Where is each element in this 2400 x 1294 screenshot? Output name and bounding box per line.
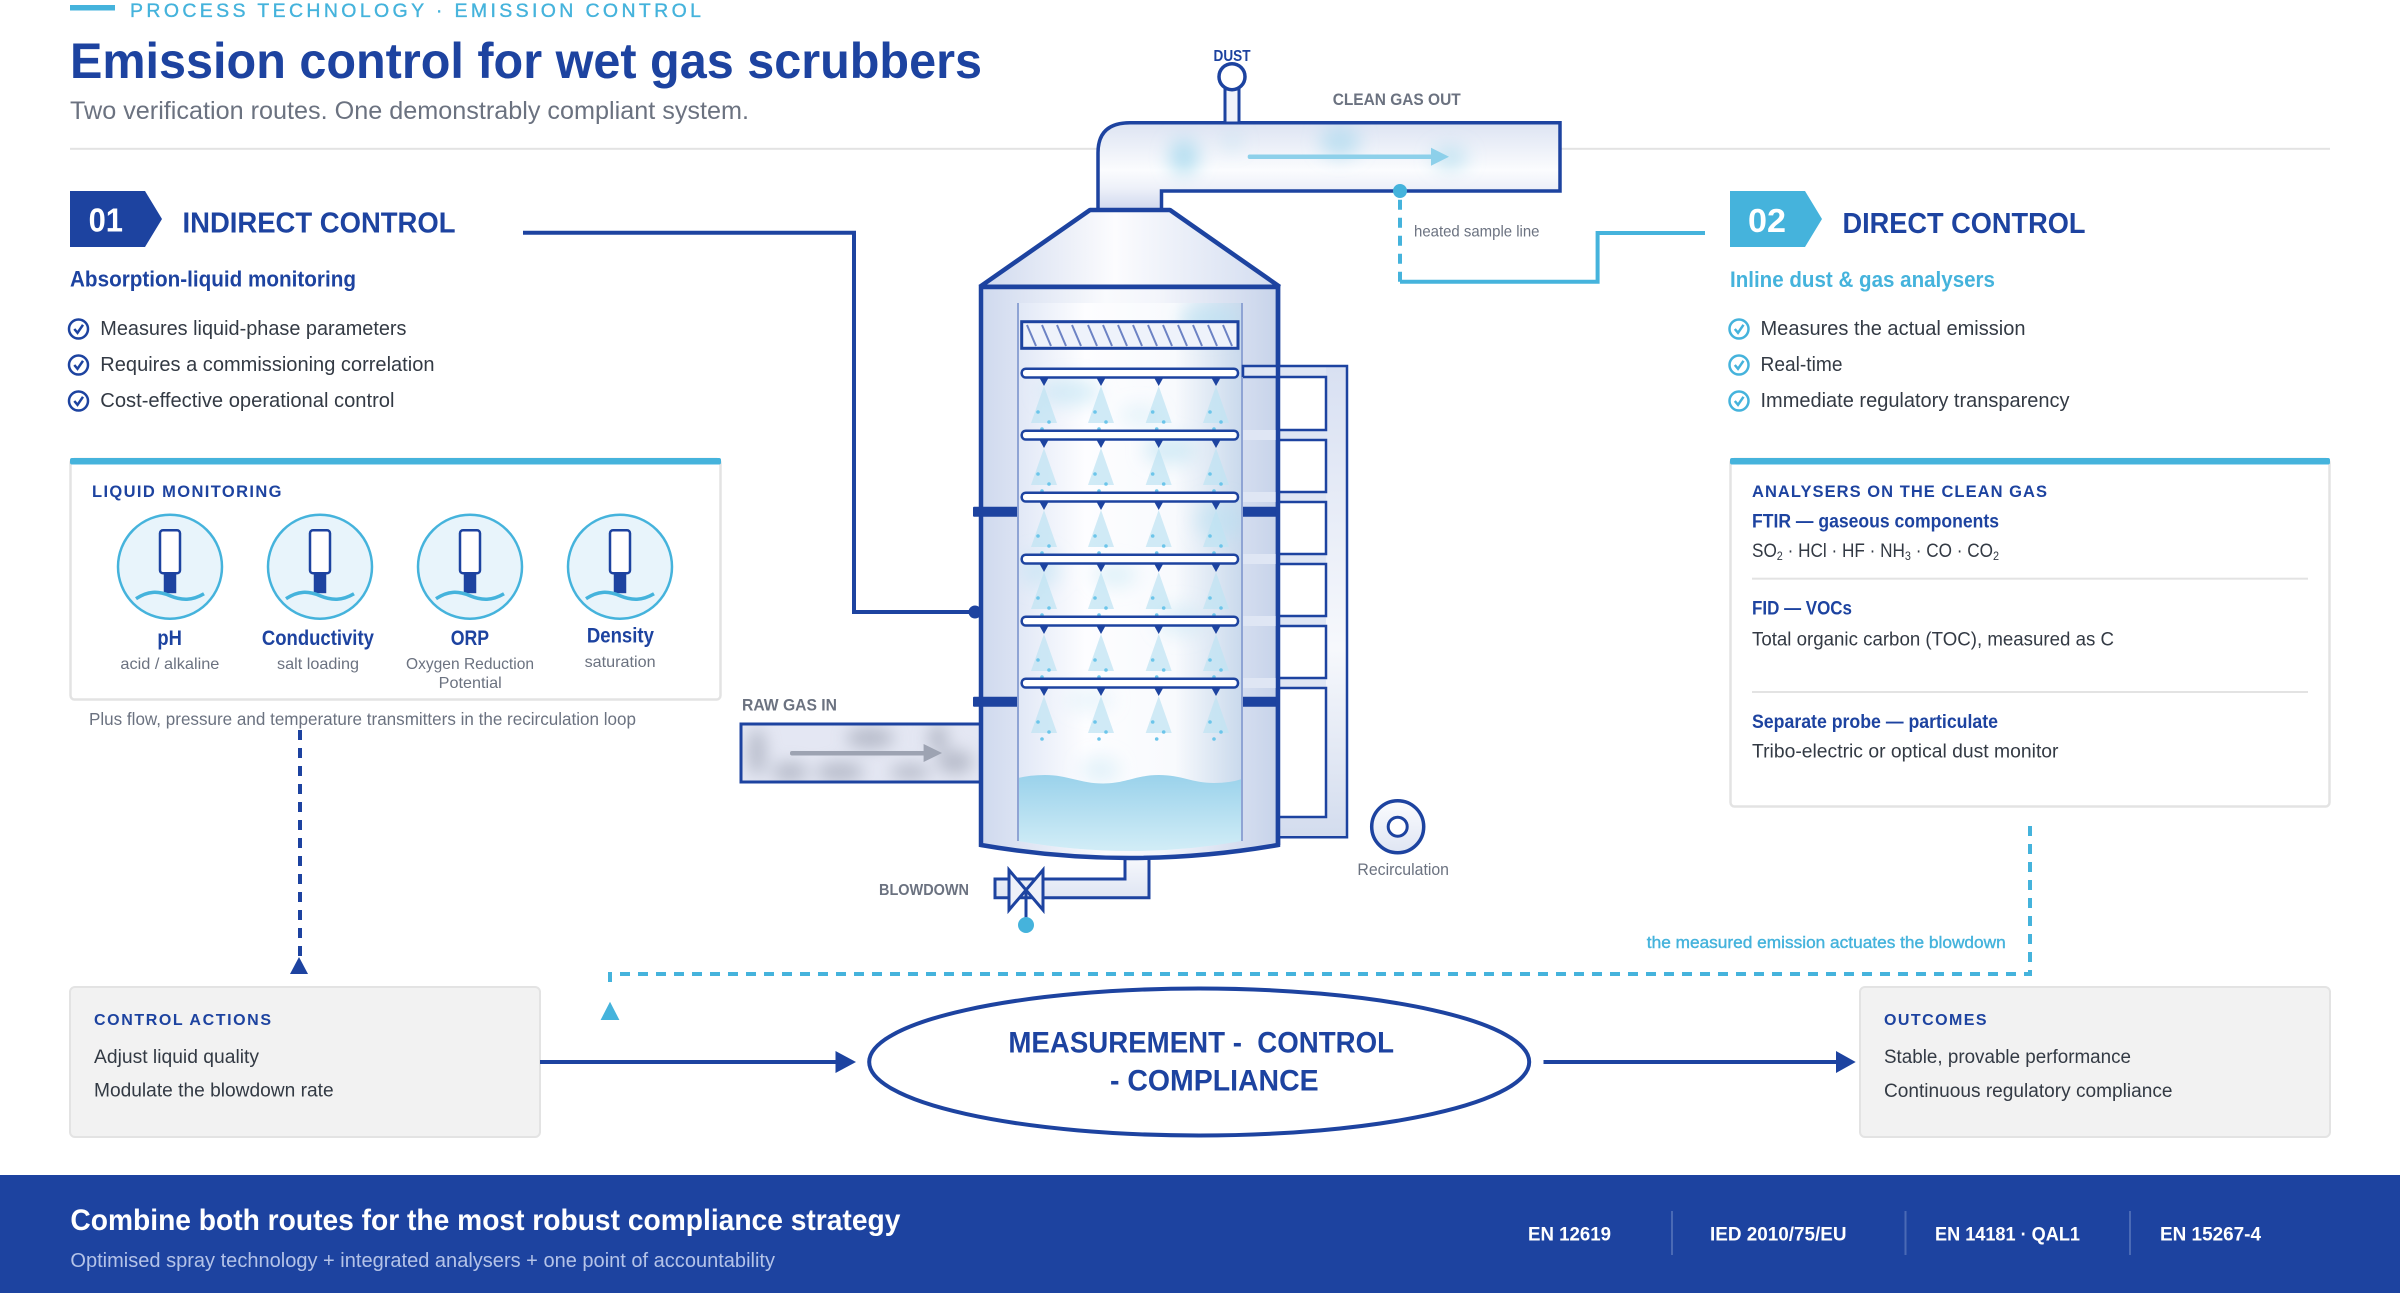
panel heading: ANALYSERS ON THE CLEAN GAS xyxy=(1752,483,2047,501)
analyser: separate probe xyxy=(1752,712,2059,762)
outcome items: Continuous regulatory compliance xyxy=(1884,1081,2172,1102)
checklist xyxy=(69,318,434,412)
analyser: FTIR: SO xyxy=(1752,541,1779,562)
action items xyxy=(94,1047,334,1102)
analyser: FTIR: · HCl · HF · NH xyxy=(1783,541,1905,562)
footer band xyxy=(0,1175,2400,1293)
checklist xyxy=(1730,318,2070,412)
eyebrow: PROCESS TECHNOLOGY · EMISSION CONTROL xyxy=(130,0,701,22)
panel heading: OUTCOMES xyxy=(1884,1012,1987,1029)
sensor: conductivity: Conductivity xyxy=(262,627,374,650)
analyser: FTIR: 2 xyxy=(1993,549,1999,563)
sensor: conductivity xyxy=(262,515,374,673)
subtitle: Two verification routes. One demonstrably compliant system. xyxy=(70,97,749,125)
panel: analysers on the clean gas xyxy=(1730,458,2330,806)
panel heading: LIQUID MONITORING xyxy=(92,483,282,501)
flanges xyxy=(973,507,1287,707)
action items: Modulate the blowdown rate xyxy=(94,1081,334,1102)
blowdown valve xyxy=(1009,870,1043,933)
recirculation pump xyxy=(1372,801,1424,853)
sensor: density xyxy=(568,515,672,671)
heading: indirect control: INDIRECT CONTROL xyxy=(182,208,456,240)
dashed arrow: liquid monitoring to control actions xyxy=(290,730,308,974)
analyser: FID xyxy=(1752,598,2114,651)
heading: direct control: DIRECT CONTROL xyxy=(1842,208,2086,240)
sensor: density: saturation xyxy=(585,654,656,671)
analyser: FTIR: 3 xyxy=(1905,549,1911,563)
subheading: absorption-liquid monitoring: Absorption-liquid monitoring xyxy=(70,267,356,292)
footer subline: Optimised spray technology + integrated analysers + one point of accountability xyxy=(70,1250,775,1272)
recirculation loop xyxy=(1243,287,1347,845)
standards list xyxy=(1528,1211,2261,1255)
action items: Adjust liquid quality xyxy=(94,1047,260,1068)
sensor: ORP xyxy=(406,515,534,692)
sensor: ORP: Oxygen Reduction xyxy=(406,656,534,673)
label: clean gas out: CLEAN GAS OUT xyxy=(1333,90,1461,109)
checklist: Immediate regulatory transparency xyxy=(1760,390,2070,412)
analyser: separate probe: Tribo-electric or optical dust monitor xyxy=(1752,742,2059,762)
checklist: Cost-effective operational control xyxy=(100,390,395,412)
badge 01 xyxy=(70,191,162,247)
note: transmitters: Plus flow, pressure and temperature transmitters in the recirculation loop xyxy=(89,709,636,729)
standards list: EN 12619 xyxy=(1528,1225,1611,1246)
absorber vessel xyxy=(981,287,1278,858)
badge number 01: 01 xyxy=(89,202,123,239)
liquid sump xyxy=(1018,775,1242,851)
sump blowdown pipe xyxy=(995,850,1149,898)
standards list: EN 14181 · QAL1 xyxy=(1935,1225,2080,1246)
analyser: separate probe: Separate probe — particulate xyxy=(1752,712,1998,733)
badge 02 xyxy=(1730,191,1822,247)
eyebrow accent bar xyxy=(70,5,115,10)
panel: control actions xyxy=(70,987,540,1137)
checklist: Requires a commissioning correlation xyxy=(100,354,435,376)
measurement-control-compliance ellipse: MEASUREMENT - CONTROL xyxy=(1008,1027,1394,1060)
label: recirculation: Recirculation xyxy=(1357,861,1449,879)
measurement-control-compliance ellipse: - COMPLIANCE xyxy=(1110,1065,1319,1098)
scrubber diagram xyxy=(741,48,1560,933)
spray headers xyxy=(1022,369,1238,688)
measurement-control-compliance ellipse xyxy=(869,988,1529,1136)
standards list: EN 15267-4 xyxy=(2160,1225,2261,1246)
checklist: Real-time xyxy=(1760,354,1842,376)
checklist: Measures liquid-phase parameters xyxy=(100,318,407,340)
demister xyxy=(1022,322,1238,348)
section: direct control xyxy=(1730,191,2086,412)
panel: liquid monitoring xyxy=(70,458,721,700)
inner chamber xyxy=(1018,303,1244,851)
sensor: density: Density xyxy=(587,625,654,648)
sensor: ORP: Potential xyxy=(439,675,502,692)
hood xyxy=(980,210,1280,287)
analyser: FTIR: 2 xyxy=(1777,549,1783,563)
section: indirect control xyxy=(69,191,456,412)
clean gas arrow xyxy=(1248,148,1449,166)
subheading: inline analysers: Inline dust & gas analysers xyxy=(1730,267,1995,292)
footer headline: Combine both routes for the most robust compliance strategy xyxy=(70,1204,901,1237)
dashed feedback arrow: analysers to blowdown xyxy=(601,826,2030,1020)
badge number 02: 02 xyxy=(1748,202,1786,239)
checklist: Measures the actual emission xyxy=(1760,318,2026,340)
connector: direct control to clean gas duct xyxy=(1400,191,1705,282)
raw gas arrow xyxy=(790,744,942,762)
label: blowdown: BLOWDOWN xyxy=(879,882,969,899)
analyser: FTIR: FTIR — gaseous components xyxy=(1752,512,1999,533)
label: dust: DUST xyxy=(1214,48,1251,65)
sensor: ORP: ORP xyxy=(451,627,489,650)
analyser: FID: FID — VOCs xyxy=(1752,598,1852,620)
analyser: FTIR: · CO · CO xyxy=(1911,541,1993,562)
arrow: measurement to outcomes xyxy=(1544,1051,1856,1073)
sensor: conductivity: salt loading xyxy=(277,656,359,673)
panel: outcomes xyxy=(1860,987,2330,1137)
clean gas duct xyxy=(1098,123,1560,210)
arrow: control actions to measurement xyxy=(540,1051,856,1073)
analyser: FID: Total organic carbon (TOC), measured as C xyxy=(1752,630,2114,651)
dust monitor xyxy=(1219,64,1245,123)
outcome items xyxy=(1884,1047,2172,1102)
outcome items: Stable, provable performance xyxy=(1884,1047,2131,1068)
analyser: FTIR xyxy=(1752,512,1999,563)
sensor: pH: pH xyxy=(157,627,182,650)
sample point xyxy=(1393,184,1407,198)
feedback caption: the measured emission actuates the blowdown xyxy=(1647,933,2006,952)
label: heated sample line: heated sample line xyxy=(1414,224,1540,241)
sensor: pH xyxy=(118,515,222,673)
spray cones xyxy=(1031,377,1229,741)
standards list: IED 2010/75/EU xyxy=(1710,1225,1846,1246)
label: raw gas in: RAW GAS IN xyxy=(742,696,837,715)
title: Emission control for wet gas scrubbers xyxy=(70,33,982,89)
raw gas inlet duct xyxy=(741,724,981,782)
sensor: pH: acid / alkaline xyxy=(120,656,219,673)
panel heading: CONTROL ACTIONS xyxy=(94,1012,271,1029)
connector: indirect control to absorber xyxy=(523,233,982,619)
